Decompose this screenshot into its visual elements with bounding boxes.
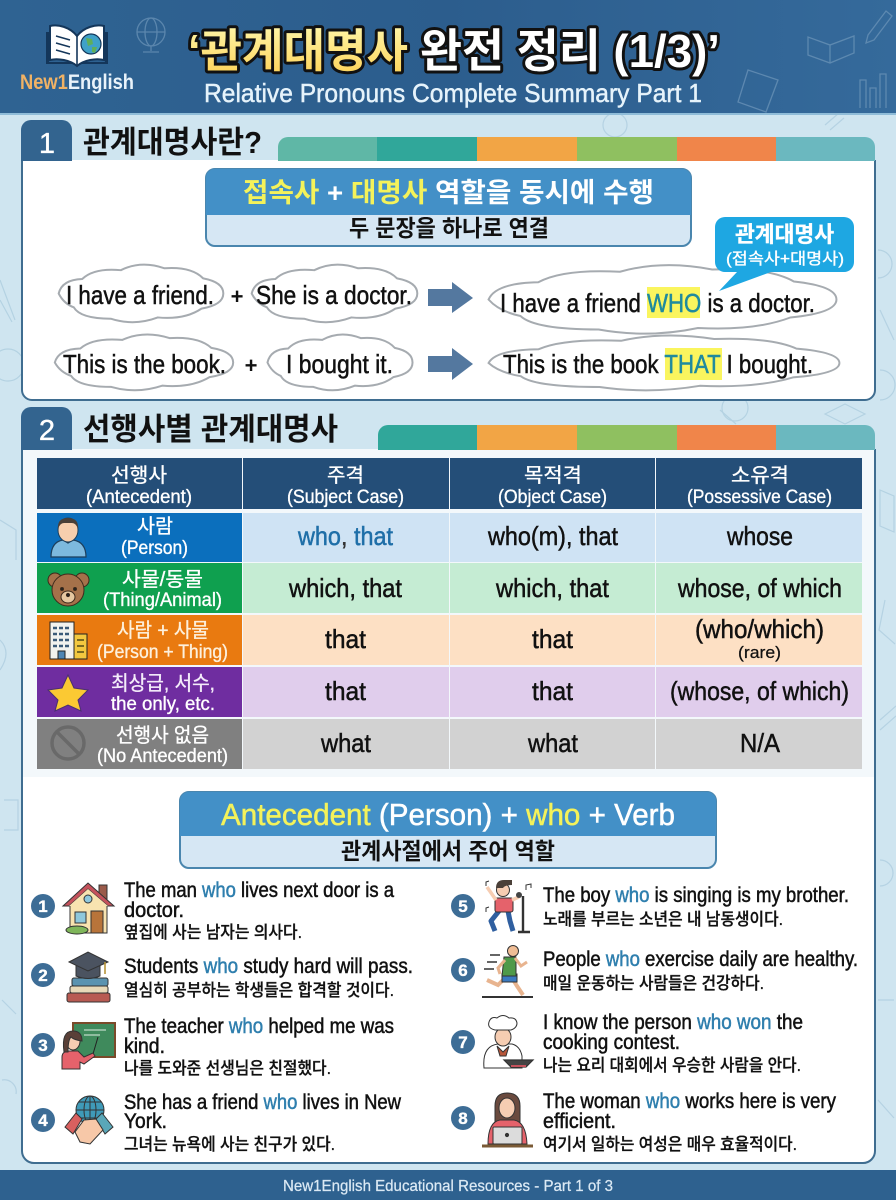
example 6 text: People who exercise daily are healthy. (543, 948, 858, 971)
example 4 text (124, 1091, 402, 1154)
icon: globe and handshake (65, 1096, 113, 1144)
cloud: combined sentence who (489, 265, 836, 334)
table header row: (Subject Case) (287, 487, 404, 508)
table header row: 소유격 (731, 464, 789, 487)
example 1 (31, 879, 394, 942)
table header row: 목적격 (524, 464, 582, 487)
example 5 text: 노래를 부르는 소년은 내 남동생이다. (543, 910, 783, 929)
icon: person (51, 518, 86, 557)
example 7 text: cooking contest. (543, 1031, 680, 1054)
icon: singer at microphone (486, 880, 531, 932)
badge 5 (451, 894, 475, 918)
example 4 text: She has a friend who lives in New (124, 1091, 402, 1114)
title: ‘관계대명사 (188, 25, 408, 77)
row: person and thing: (who/which) (695, 614, 824, 644)
icon: buildings (50, 622, 87, 659)
row: superlative and ordinal: 최상급, 서수, (111, 672, 215, 695)
badge 7: 7 (458, 1033, 468, 1052)
definition subline: 두 문장을 하나로 연결 (349, 215, 549, 241)
row: thing or animal: 사물/동물 (122, 568, 203, 591)
icon: graduation cap and books (67, 952, 110, 1002)
icon: woman at laptop (482, 1093, 533, 1146)
example 1 text: doctor. (124, 899, 184, 922)
badge 8: 8 (458, 1109, 468, 1128)
callout: relative pronoun (715, 217, 854, 291)
cloud: I have a friend: I have a friend. (66, 280, 214, 310)
section 2 panel (21, 407, 875, 1163)
panel body: section 1 (22, 160, 875, 400)
row: person and thing (37, 614, 862, 665)
section 1 number tab (21, 120, 72, 161)
cloud: This is the book: This is the book. (63, 349, 226, 379)
section 2 heading: 선행사별 관계대명사 (83, 412, 338, 447)
definition box (206, 169, 691, 246)
cloud: I have a friend (59, 265, 223, 322)
row: person and thing: that (532, 624, 574, 654)
example 1 text: The man who lives next door is a (124, 879, 394, 902)
badge 2: 2 (38, 966, 48, 985)
icon: bear (48, 573, 89, 606)
section 1 number tab: 1 (39, 128, 55, 160)
row: person (37, 513, 862, 562)
row: no antecedent: what (527, 728, 579, 758)
example 5 text: The boy who is singing is my brother. (543, 884, 849, 907)
example 8 text (543, 1090, 836, 1154)
badge 6: 6 (458, 961, 468, 980)
cloud: She is a doctor (252, 265, 417, 322)
table header row: (Possessive Case) (687, 487, 832, 508)
example 7 text: 나는 요리 대회에서 우승한 사람을 안다. (543, 1056, 801, 1075)
icon: star (48, 675, 88, 711)
section 1 colour band (278, 137, 875, 161)
example 7 text (543, 1011, 803, 1075)
example 7 (451, 1011, 803, 1075)
cloud: combined sentence who: I have a friend WHO is a doctor. (500, 288, 815, 318)
badge 2 (31, 963, 55, 987)
icon: teacher at chalkboard (62, 1023, 115, 1069)
example 6 (451, 946, 858, 997)
row: person and thing: (rare) (738, 643, 781, 662)
table header row: (Antecedent) (86, 487, 192, 508)
example 3 text: 나를 도와준 선생님은 친절했다. (124, 1059, 331, 1078)
logo: open book with globe (46, 25, 108, 66)
row: person: who(m), that (487, 521, 619, 551)
cloud: I bought it (267, 335, 413, 390)
formula subline: 관계사절에서 주어 역할 (341, 838, 555, 864)
row: person and thing: that (325, 624, 367, 654)
section 2 number tab: 2 (39, 415, 55, 447)
example 8 text: 여기서 일하는 여성은 매우 효율적이다. (543, 1135, 797, 1154)
section 1 panel (21, 120, 875, 400)
row: superlative and ordinal: that (532, 676, 574, 706)
cloud: I bought it: I bought it. (286, 349, 393, 379)
arrow (428, 348, 473, 380)
formula box (180, 792, 716, 868)
badge 8 (451, 1106, 475, 1130)
table header row (37, 458, 862, 509)
example 3 (31, 1015, 394, 1078)
row: superlative and ordinal: the only, etc. (111, 694, 215, 715)
example 1 text: 옆집에 사는 남자는 의사다. (124, 923, 302, 942)
row: no antecedent: 선행사 없음 (116, 724, 209, 747)
row: thing or animal: (Thing/Animal) (103, 590, 222, 611)
example 8 text: The woman who works here is very (543, 1090, 836, 1113)
row: superlative and ordinal: (whose, of which) (670, 676, 849, 706)
arrow (428, 282, 473, 313)
example 2 text: 열심히 공부하는 학생들은 합격할 것이다. (124, 981, 394, 1000)
example 6 text (543, 948, 858, 993)
cloud: She is a doctor: She is a doctor. (256, 280, 412, 310)
example 2 text: Students who study hard will pass. (124, 955, 413, 978)
footer bar (0, 1170, 896, 1200)
badge 4 (31, 1108, 55, 1132)
cloud: combined sentence that (489, 336, 839, 390)
row: no antecedent: what (320, 728, 372, 758)
row: thing or animal: which, that (495, 573, 610, 603)
example 1 text (124, 879, 394, 942)
example 4 (31, 1091, 402, 1154)
badge 3: 3 (38, 1036, 48, 1055)
row: person: (Person) (121, 538, 188, 559)
icon: house (63, 883, 114, 934)
example 3 text (124, 1015, 394, 1078)
example 4 text: York. (124, 1110, 167, 1133)
example 2 text (124, 955, 413, 1000)
row: thing or animal: which, that (288, 573, 403, 603)
footer bar: New1English Educational Resources - Part 1 of 3 (283, 1178, 613, 1195)
row: no antecedent: N/A (740, 728, 781, 758)
badge 1: 1 (38, 897, 48, 916)
badge 3 (31, 1033, 55, 1057)
table header row: (Object Case) (498, 487, 607, 508)
subtitle: Relative Pronouns Complete Summary Part 1 (204, 78, 702, 108)
example 7 text: I know the person who won the (543, 1011, 803, 1034)
badge 6 (451, 958, 475, 982)
example 6 text: 매일 운동하는 사람들은 건강하다. (543, 974, 764, 993)
table header row: 주격 (327, 464, 364, 487)
badge 7 (451, 1030, 475, 1054)
formula headline: Antecedent (Person) + who + Verb (221, 797, 675, 832)
plus sign: + (231, 284, 243, 309)
row: thing or animal (37, 563, 862, 613)
panel body: section 2 (22, 449, 875, 1163)
section 1 heading: 관계대명사란? (83, 125, 262, 160)
example 4 text: 그녀는 뉴욕에 사는 친구가 있다. (124, 1135, 335, 1154)
example 8 text: efficient. (543, 1110, 616, 1133)
example 5 (451, 880, 849, 932)
icon: runner (482, 946, 533, 997)
antecedent table (37, 458, 862, 769)
section 2 colour band (378, 425, 875, 450)
example 8 (451, 1090, 836, 1154)
row: thing or animal: whose, of which (677, 573, 842, 603)
badge 4: 4 (38, 1111, 48, 1130)
title (188, 25, 720, 77)
title: 완전 정리 (1/3)’ (420, 25, 720, 77)
row: no antecedent: (No Antecedent) (97, 746, 228, 767)
table header row: 선행사 (111, 464, 167, 487)
badge 1 (31, 894, 55, 918)
icon: prohibited sign (52, 727, 84, 759)
definition headline: 접속사 + 대명사 역할을 동시에 수행 (243, 178, 654, 208)
title: 완전 정리 (1/3)’ (420, 25, 720, 77)
row: no antecedent (37, 719, 862, 769)
row: person and thing: (Person + Thing) (97, 642, 228, 663)
title: ‘관계대명사 (188, 25, 408, 77)
header banner (0, 0, 896, 115)
example 3 text: The teacher who helped me was (124, 1015, 394, 1038)
row: person: whose (726, 521, 793, 551)
row: person and thing: 사람 + 사물 (117, 619, 209, 642)
example 3 text: kind. (124, 1035, 165, 1058)
row: person: 사람 (137, 515, 173, 538)
badge 5: 5 (458, 897, 468, 916)
section 2 number tab (21, 407, 72, 450)
icon: chef (484, 1016, 533, 1068)
cloud: combined sentence that: This is the book THAT I bought. (503, 349, 813, 379)
logo wordmark: New1English (20, 71, 134, 94)
callout: relative pronoun: (접속사+대명사) (726, 250, 844, 268)
example 2 (31, 952, 413, 1002)
row: superlative and ordinal (37, 667, 862, 717)
plus sign: + (245, 353, 257, 378)
callout: relative pronoun: 관계대명사 (735, 222, 834, 247)
example 5 text (543, 884, 849, 929)
cloud: This is the book (55, 335, 233, 390)
row: superlative and ordinal: that (325, 676, 367, 706)
row: person: who, that (297, 521, 394, 551)
